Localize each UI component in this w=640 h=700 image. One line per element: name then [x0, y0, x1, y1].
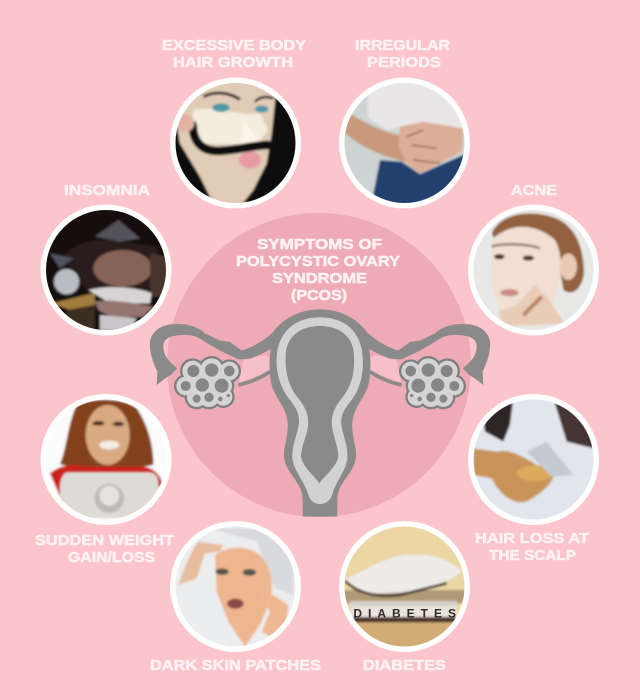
label: ACNE: [511, 183, 557, 199]
photo: worried woman holding scale: [48, 400, 162, 520]
uterus and ovaries illustration: [150, 309, 490, 517]
label: DARK SKIN PATCHES: [150, 658, 321, 674]
letter blocks: DIABETES: [353, 606, 456, 620]
panel: dark skin patches: [150, 521, 321, 674]
right ovary: [399, 356, 466, 409]
title: symptoms of PCOS: (PCOS): [291, 288, 347, 304]
label: HAIR GROWTH: [173, 55, 293, 71]
panel: excessive body hair growth: [162, 38, 306, 210]
title: symptoms of PCOS: SYNDROME: [272, 271, 367, 287]
label: [355, 38, 451, 71]
title: symptoms of PCOS: SYMPTOMS OF: [257, 237, 382, 253]
label: [162, 38, 306, 71]
label: INSOMNIA: [64, 183, 151, 199]
title: symptoms of PCOS: POLYCYSTIC OVARY: [236, 254, 400, 270]
left fallopian tube: [150, 324, 283, 385]
ring: [339, 78, 470, 208]
panel: diabetes: [337, 521, 470, 674]
ring: [170, 78, 301, 208]
panel: irregular periods: [337, 38, 470, 210]
ring: [170, 521, 301, 652]
ring: [40, 394, 172, 525]
left gap between tube and ligament: [239, 356, 269, 383]
title: symptoms of PCOS: [236, 237, 400, 304]
label: GAIN/LOSS: [68, 550, 155, 566]
photo: woman in towel checking skin: [176, 526, 296, 646]
right gap between tube and ligament: [371, 356, 401, 383]
photo: spoon of sugar and letter blocks: [344, 526, 464, 646]
ring: [40, 204, 172, 336]
label: [35, 533, 174, 566]
label: EXCESSIVE BODY: [162, 38, 306, 54]
photo: woman with hair moustache: [176, 83, 296, 203]
panel: sudden weight gain/loss: [35, 394, 174, 566]
panel: hair loss at the scalp: [467, 394, 600, 564]
right fallopian tube: [357, 324, 490, 385]
uterine lining: [277, 317, 363, 504]
uterus outer wall: [270, 309, 370, 517]
label: SUDDEN WEIGHT: [35, 533, 174, 549]
label: HAIR LOSS AT: [475, 531, 589, 547]
left ovary: [174, 356, 241, 409]
label: [475, 531, 589, 564]
central circle: [167, 213, 471, 517]
label: IRREGULAR: [355, 38, 451, 54]
ring: [468, 394, 599, 525]
panel: insomnia: [40, 183, 173, 337]
photo: hands on abdomen: [344, 83, 464, 203]
photo: hand holding hairbrush: [474, 400, 594, 520]
photo: woman touching acne on cheek: [474, 210, 594, 330]
ring: [339, 521, 470, 652]
ring: [468, 204, 599, 336]
uterine cavity: [286, 326, 354, 483]
label: PERIODS: [367, 55, 441, 71]
label: DIABETES: [363, 658, 446, 674]
panel: acne: [467, 183, 600, 337]
photo: woman awake beside alarm clock: [46, 210, 166, 330]
label: THE SCALP: [489, 548, 576, 564]
